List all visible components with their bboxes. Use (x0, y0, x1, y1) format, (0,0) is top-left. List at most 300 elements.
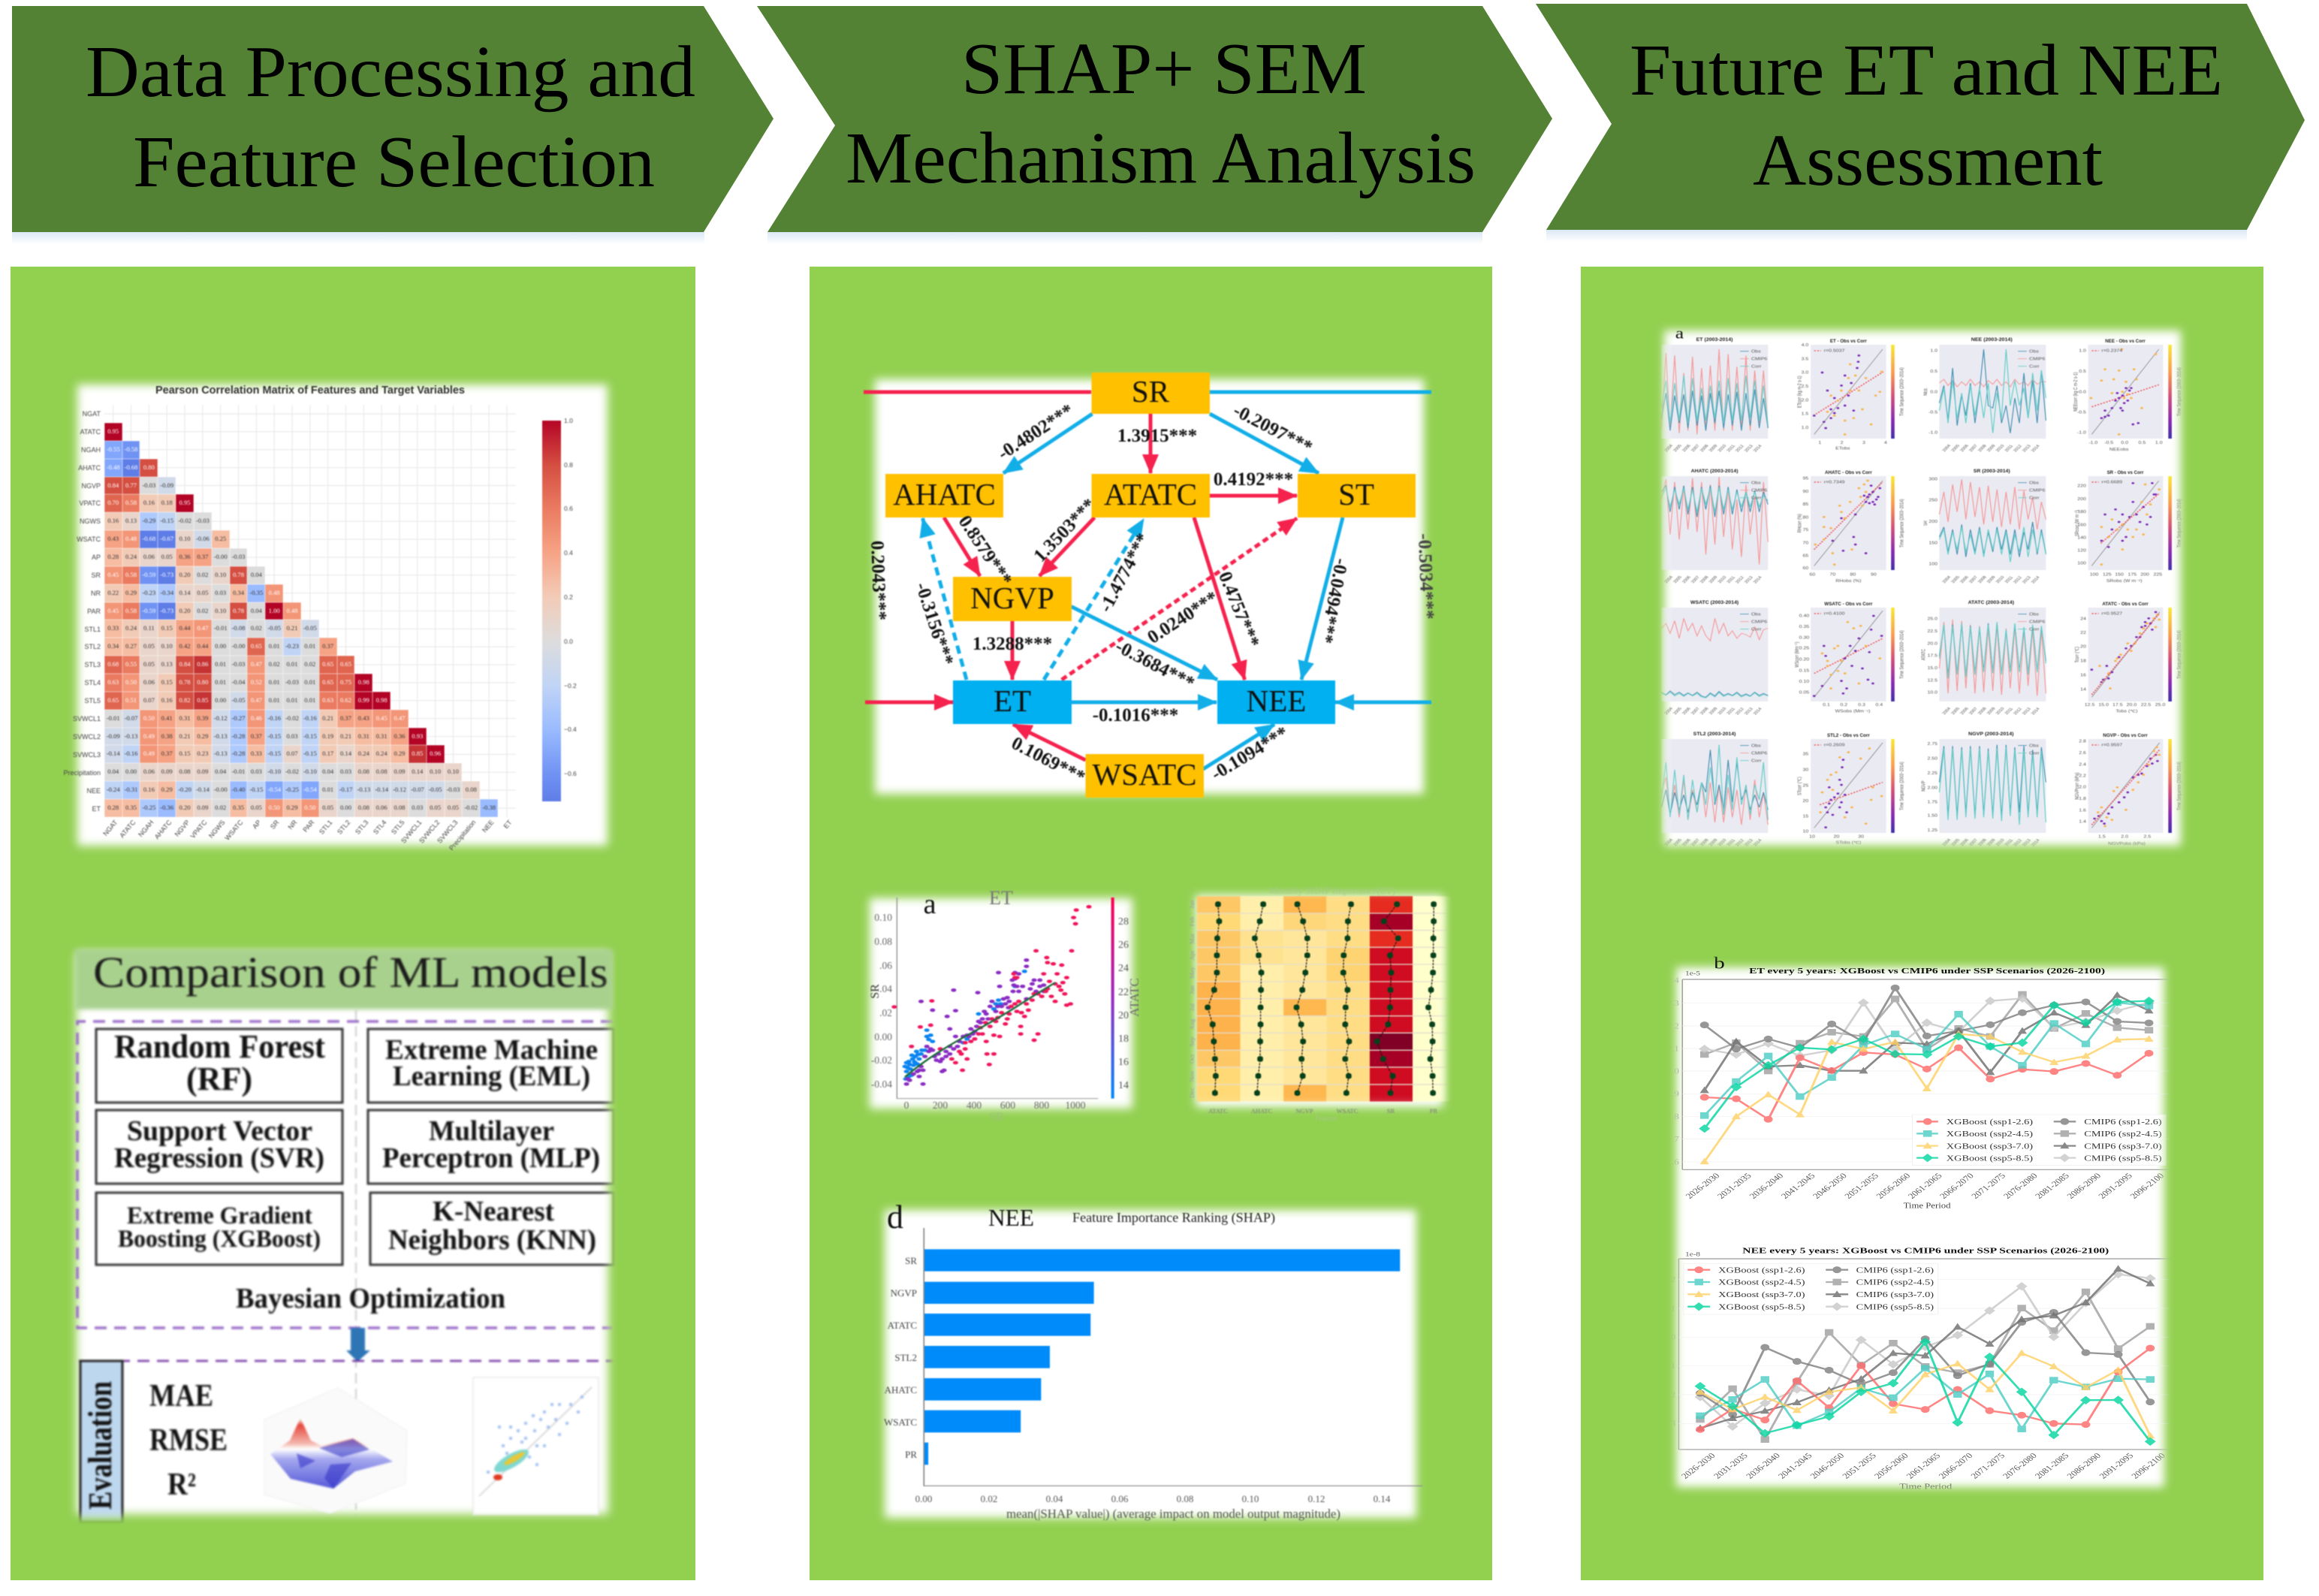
line chart: ET projections: 1e-5 (1685, 970, 1700, 977)
line chart: NEE projections: 2076-2080 (2001, 1452, 2039, 1480)
heatmap cells: -0.06 (196, 535, 210, 542)
path coefficients (867, 400, 1437, 788)
plot: NGVP observed vs corrected: 2.5 (2144, 835, 2152, 839)
plot: ATATC time series: 20.0 (1927, 642, 1938, 646)
heatmap colorbar: 1.0 (564, 417, 573, 424)
plot: ATATC observed vs corrected: 17.5 (2112, 704, 2123, 707)
heatmap cells: 0.80 (197, 678, 208, 686)
bias correction small multiples (1661, 324, 2182, 876)
heatmap row labels: VPATC (79, 499, 101, 507)
heatmap cells: 0.78 (179, 678, 191, 686)
line chart: ET projections (1666, 954, 2171, 1210)
plot: STL2 time series: 2010 (1717, 838, 1728, 847)
SHAP dependence scatter: ET vs SR: .02 (879, 1007, 892, 1018)
plot: NEE observed vs corrected: NEE - Obs vs Corr (2105, 338, 2146, 344)
plot: SR observed vs corrected: SRcorr (W m⁻²) (2076, 510, 2080, 536)
heatmap cells: 0.58 (125, 607, 137, 614)
heatmap cells: 0.06 (143, 553, 155, 560)
row: WSATC and ATATC (1661, 599, 2182, 746)
ET chart legend: CMIP6 (ssp3-7.0) (2084, 1142, 2162, 1151)
heatmap row labels: SR (91, 572, 101, 579)
line chart: ET projections: 2046-2050 (1811, 1172, 1849, 1200)
heatmap cells: 0.55 (125, 660, 137, 668)
monthly SHAP importance heatmap: Feature (1315, 1115, 1338, 1123)
plot: STL2 time series: 2008 (1699, 838, 1710, 847)
plot: NEE observed vs corrected: r=0.2374 (2101, 349, 2123, 353)
plot: SR observed vs corrected: 150 (2115, 573, 2124, 577)
plot: ATATC time series: 22.5 (1927, 630, 1938, 634)
heatmap cells: 0.65 (322, 678, 333, 686)
plot: AHATC observed vs corrected: 70 (1830, 573, 1836, 577)
SHAP dependence scatter: ET vs SR: 20 (1118, 1010, 1129, 1021)
line chart: ET projections: 2086-2090 (2065, 1172, 2103, 1200)
plot: ATATC observed vs corrected: Tcorr (℃) (2076, 647, 2080, 662)
plot: NEE observed vs corrected: 0.0 (2079, 391, 2087, 394)
heatmap cells: -0.12 (393, 786, 406, 793)
plot: STL2 observed vs corrected: 35 (1803, 753, 1809, 756)
heatmap cells: 0.18 (161, 499, 173, 506)
plot: SR observed vs corrected: 200 (2140, 573, 2150, 577)
NEE chart legend: CMIP6 (ssp2-4.5) (1856, 1278, 1934, 1287)
heatmap cells: 0.03 (286, 732, 298, 740)
plot: NGVP time series: 2005 (1950, 838, 1961, 847)
header arrow: Future ET and NEE Assessment: Future ET and NEE (1630, 30, 2223, 111)
plot: ET observed vs corrected: ETcorr (kg m-2 s-1) (1798, 376, 1803, 408)
plot: NEE time series: 2011 (2004, 445, 2014, 453)
evaluation label: Evaluation (82, 1381, 119, 1510)
plot: ET observed vs corrected: ETobs (1835, 447, 1850, 451)
plot: NGVP observed vs corrected: NGVPobs (kPa) (2108, 843, 2146, 846)
heatmap column labels: ET (502, 818, 514, 830)
heatmap cells: -0.27 (232, 714, 245, 722)
SHAP dependence scatter: ET vs SR: 18 (1118, 1033, 1129, 1045)
line chart: NEE projections: 2071-2075 (1969, 1452, 2007, 1480)
plot: SR observed vs corrected: 120 (2077, 549, 2087, 553)
heatmap cells: 0.20 (179, 571, 191, 578)
heatmap cells: 0.00 (340, 804, 351, 811)
plot: AHATC observed vs corrected: 65 (1803, 554, 1809, 558)
plot: ET time series: 2013 (1744, 445, 1754, 453)
heatmap cells: 0.09 (161, 768, 173, 775)
plot: STL2 observed vs corrected (1798, 732, 1905, 845)
line chart: NEE projections: 2061-2065 (1904, 1452, 1943, 1480)
SHAP feature importance bar chart: 0.10 (1242, 1493, 1259, 1504)
plot: SR observed vs corrected: 100 (2077, 562, 2087, 566)
heatmap cells: -0.03 (142, 481, 155, 489)
line chart: NEE projections: NEE every 5 years: XGBoost vs CMIP6 under SSP Scenarios (2026-2100) (1742, 1246, 2109, 1255)
model box: XGBoost: Extreme Gradient (127, 1202, 312, 1229)
SHAP dependence scatter: ET vs SR: 200 (933, 1100, 948, 1111)
ET chart legend: CMIP6 (ssp2-4.5) (2084, 1130, 2162, 1139)
plot: ATATC observed vs corrected: 18 (2080, 659, 2087, 663)
plot: AHATC observed vs corrected: 95 (1803, 477, 1809, 481)
heatmap cells: 0.65 (340, 660, 351, 668)
heatmap cells: -0.17 (339, 786, 352, 793)
heatmap cells: 0.47 (251, 660, 262, 668)
path coefficients: 0.0240*** (1144, 587, 1222, 648)
plot: NEE observed vs corrected: Time Sequence (2003~2014) (2177, 367, 2182, 416)
heatmap cells: 0.85 (197, 696, 208, 704)
SHAP dependence scatter: ET vs SR: ET (989, 887, 1013, 909)
plot: AHATC observed vs corrected: 80 (1850, 573, 1856, 577)
heatmap cells: 0.24 (376, 750, 388, 757)
heatmap cells: 0.08 (466, 786, 477, 793)
plot: SR time series: 200 (1928, 520, 1938, 524)
heatmap cells: 0.02 (197, 571, 208, 578)
header arrow: SHAP+ SEM Mechanism Analysis (757, 6, 1552, 244)
plot: NGVP observed vs corrected: 1.6 (2079, 809, 2087, 813)
plot: SR time series: 2010 (1995, 575, 2006, 584)
heatmap cells: 0.41 (161, 714, 173, 722)
heatmap column labels: AHATC (153, 818, 173, 840)
heatmap cells: -0.00 (214, 786, 228, 793)
heatmap cells: 0.14 (412, 768, 423, 775)
heatmap colorbar: −0.2 (564, 682, 577, 689)
line chart: ET projections: 2081-2085 (2034, 1172, 2071, 1200)
heatmap cells: 0.01 (286, 660, 298, 668)
heatmap cells: -0.10 (267, 768, 281, 775)
model box: extreme machine learning: Extreme Machine (385, 1034, 598, 1066)
heatmap cells: 0.48 (125, 535, 137, 542)
SHAP dependence scatter: ET vs SR: .04 (879, 983, 892, 994)
heatmap cells: -0.31 (125, 786, 137, 793)
plot: STL2 observed vs corrected: 10 (1809, 835, 1816, 839)
plot: ET observed vs corrected: 2 (1841, 442, 1844, 445)
plot: WSATC observed vs corrected: 0.2 (1840, 704, 1848, 707)
heatmap cells: 0.21 (340, 732, 351, 740)
path coefficients: 1.3503*** (1030, 495, 1100, 566)
heatmap cells: 0.16 (161, 696, 173, 704)
plot: SR observed vs corrected: 175 (2128, 573, 2137, 577)
line chart: ET projections: 2071-2075 (1970, 1172, 2008, 1200)
heatmap cells: -0.68 (142, 535, 155, 542)
plot: WSATC time series: 2012 (1735, 707, 1745, 716)
monthly SHAP importance heatmap: ATATC (1208, 1107, 1228, 1115)
heatmap cells: 1.00 (269, 607, 280, 614)
plot: WSATC observed vs corrected: WScorr (Mm⁻¹) (1795, 642, 1800, 668)
monthly SHAP importance heatmap: Jul (1188, 1003, 1196, 1011)
heatmap cells: 0.42 (179, 642, 191, 650)
heatmap row labels: WSATC (77, 536, 101, 543)
plot: NEE observed vs corrected: NEEcorr (kg C m-2 s-1) (2073, 373, 2079, 412)
line chart: ET projections: 2076-2080 (2001, 1172, 2040, 1200)
plot: NGVP time series: 2012 (2013, 839, 2023, 847)
heatmap cells: -0.15 (303, 750, 317, 757)
heatmap cells (104, 405, 517, 817)
plot: AHATC observed vs corrected: 80 (1803, 516, 1809, 520)
plot: WSATC observed vs corrected: 0.10 (1799, 680, 1810, 684)
node: NEE (1217, 680, 1335, 724)
heatmap cells: 0.37 (161, 750, 173, 757)
heatmap row labels: ET (92, 805, 101, 813)
SHAP feature importance bar chart: 0.00 (915, 1493, 932, 1504)
panel: data processing and feature selection (11, 267, 695, 1580)
heatmap cells: -0.68 (125, 463, 137, 471)
heatmap cells: 0.50 (304, 804, 315, 811)
plot: STL2 observed vs corrected: 20 (1834, 835, 1840, 839)
heatmap cells: 0.62 (340, 696, 351, 704)
monthly SHAP importance heatmap: WSATC (1337, 1107, 1359, 1115)
line chart: ET projections: b (1714, 954, 1725, 972)
plot: WSATC observed vs corrected: 0.35 (1799, 626, 1810, 629)
row: STL2 and NGVP (1661, 731, 2182, 876)
heatmap cells: -0.08 (232, 624, 245, 632)
SHAP feature importance bar chart: NGVP (891, 1287, 917, 1299)
plot: AHATC time series: 2012 (1735, 576, 1745, 584)
node: AHATC: AHATC (893, 477, 996, 511)
plot: NEE time series (1924, 336, 2046, 483)
heatmap cells: -0.14 (196, 786, 210, 793)
plot: STL2 observed vs corrected: 30 (1803, 768, 1809, 772)
plot: NEE time series: 1.0 (1930, 349, 1938, 353)
heatmap cells: -0.67 (160, 535, 173, 542)
heatmap cells: 0.01 (269, 642, 280, 650)
plot: ATATC observed vs corrected: 22.5 (2141, 704, 2152, 707)
plot: STL2 time series: 2007 (1690, 838, 1701, 847)
heatmap cells: -0.07 (411, 786, 424, 793)
line chart: ET projections: ET every 5 years: XGBoost vs CMIP6 under SSP Scenarios (2026-2100) (1749, 967, 2105, 976)
plot: SR observed vs corrected: r=0.6689 (2101, 481, 2123, 484)
heatmap cells: 0.05 (143, 660, 155, 668)
heatmap cells: 0.14 (179, 589, 191, 596)
heatmap cells: 0.49 (143, 732, 155, 740)
monthly SHAP importance heatmap: Oct (1188, 1054, 1196, 1063)
plot: STL2 observed vs corrected: 20 (1803, 800, 1809, 804)
plot: SR time series: SR (2003-2014) (1974, 468, 2010, 474)
heatmap cells: 0.24 (358, 750, 369, 757)
heatmap column labels: PAR (301, 818, 316, 834)
model box: KNN: Neighbors (KNN) (388, 1224, 596, 1256)
monthly SHAP importance heatmap: SR (1387, 1107, 1395, 1115)
monthly SHAP importance heatmap: May (1188, 966, 1196, 979)
heatmap row labels: NGVP (81, 482, 101, 490)
heatmap column labels: NGAT (101, 818, 119, 837)
plot: NGVP observed vs corrected (2076, 732, 2182, 846)
line chart: NEE projections: Time Period (1899, 1482, 1953, 1491)
plot: NEE time series: 2007 (1968, 444, 1979, 453)
heatmap cells: 0.02 (197, 607, 208, 614)
heatmap cells: 0.03 (215, 589, 226, 596)
plot: AHATC observed vs corrected: 60 (1810, 573, 1816, 577)
heatmap cells: -0.12 (214, 714, 228, 722)
heatmap cells: -0.15 (267, 732, 281, 740)
plot: ATATC time series: CMIP6 (2029, 620, 2046, 624)
plot: STL2 time series: CMIP6 (1751, 752, 1768, 756)
plot: AHATC time series: 2004 (1664, 575, 1674, 584)
heatmap column labels: STL4 (372, 819, 388, 836)
ML heading: Comparison of ML models (93, 948, 608, 997)
heatmap colorbar: −0.6 (564, 770, 577, 777)
heatmap cells: -0.09 (107, 732, 120, 740)
heatmap cells: 0.01 (322, 786, 333, 793)
plot: SR observed vs corrected: 140 (2077, 536, 2087, 540)
heatmap cells: 0.00 (215, 642, 226, 650)
plot: SR time series: 2009 (1986, 575, 1997, 584)
header arrow: Future ET and NEE Assessment: Assessment (1753, 120, 2103, 201)
plot: NEE time series: NEE (1924, 388, 1928, 396)
plot: SR time series: 100 (1928, 563, 1938, 566)
heatmap cells: 0.01 (304, 678, 315, 686)
plot: AHATC time series: 2008 (1699, 575, 1710, 584)
plot: STL2 time series: 2013 (1744, 839, 1754, 847)
ET chart legend: XGBoost (ssp1-2.6) (1947, 1118, 2033, 1127)
plot: ET time series: 2007 (1690, 444, 1701, 453)
line chart: ET projections: 2051-2055 (1843, 1172, 1881, 1200)
plot: NGVP observed vs corrected: 1.4 (2079, 820, 2087, 824)
plot: WSATC time series: CMIP6 (1751, 620, 1768, 624)
heatmap cells: 0.15 (161, 624, 173, 632)
NEE chart legend: XGBoost (ssp2-4.5) (1718, 1278, 1805, 1287)
heatmap cells: 0.05 (161, 553, 173, 560)
line chart: ET projections: 2.1 (1666, 1045, 1679, 1053)
plot: WSATC observed vs corrected: 0.30 (1799, 636, 1810, 640)
SHAP feature importance bar chart: 0.08 (1177, 1493, 1193, 1504)
heatmap cells: -0.38 (482, 804, 496, 811)
plot: SR observed vs corrected: 100 (2090, 573, 2099, 577)
plot: STL2 time series: 2014 (1753, 839, 1763, 847)
plot: ET observed vs corrected (1798, 338, 1905, 451)
plot: ATATC observed vs corrected: 20 (2080, 645, 2087, 649)
plot: ATATC time series: 2013 (2022, 707, 2032, 716)
plot: STL2 time series: Obs (1751, 744, 1761, 748)
plot: AHATC time series: 2011 (1726, 576, 1736, 584)
heatmap colorbar: 0.2 (564, 593, 573, 601)
plot: ET observed vs corrected: Time Sequence (2003~2014) (1900, 367, 1905, 416)
plot: NGVP time series: 2013 (2022, 839, 2032, 847)
plot: ET observed vs corrected: 4 (1884, 442, 1887, 445)
heatmap cells: 0.33 (107, 624, 119, 632)
plot: STL2 time series: 2012 (1735, 839, 1745, 847)
path coefficients: -0.4802*** (994, 400, 1078, 464)
heatmap row labels: AHATC (78, 464, 101, 472)
NEE chart legend: CMIP6 (ssp5-8.5) (1856, 1302, 1934, 1311)
path coefficients: 1.3288*** (973, 634, 1052, 654)
plot: NEE time series: 2006 (1959, 444, 1970, 453)
node: ATATC (1092, 474, 1210, 517)
plot: NGVP observed vs corrected: NGVP - Obs vs Corr (2103, 732, 2149, 738)
node: AHATC (885, 474, 1003, 517)
ET chart legend: XGBoost (ssp3-7.0) (1947, 1142, 2033, 1151)
heatmap cells: -0.03 (446, 786, 460, 793)
heatmap row labels: NEE (86, 787, 101, 795)
plot: STL2 time series: 2009 (1708, 838, 1719, 847)
model box: extreme machine learning (368, 1029, 614, 1103)
path coefficients: -0.2097*** (1230, 400, 1316, 458)
heatmap cells: 0.46 (251, 714, 262, 722)
heatmap cells: -0.58 (125, 445, 137, 453)
plot: ATATC observed vs corrected: 14 (2080, 688, 2087, 692)
heatmap cells: 0.06 (143, 768, 155, 775)
path coefficients: -0.1094*** (1208, 723, 1292, 785)
heatmap row labels: NR (91, 590, 101, 597)
plot: NEE observed vs corrected: -0.5 (2104, 442, 2114, 445)
plot: ET observed vs corrected: 1.0 (1802, 427, 1809, 430)
plot: ATATC observed vs corrected: 12.5 (2085, 704, 2095, 707)
line chart: ET projections: 2.2 (1666, 1022, 1679, 1030)
plot: SR time series: 2005 (1950, 575, 1961, 584)
plot: WSATC observed vs corrected (1795, 601, 1905, 714)
heatmap cells: 0.63 (107, 678, 119, 686)
model box: random forest: (RF) (186, 1060, 252, 1097)
heatmap cells: 0.99 (358, 696, 369, 704)
heatmap cells: 0.20 (179, 804, 191, 811)
plot: ET time series: 2004 (1664, 444, 1674, 453)
monthly SHAP importance heatmap: AHATC (1251, 1107, 1272, 1115)
heatmap cells: 0.39 (197, 714, 208, 722)
heatmap cells: 0.05 (448, 804, 459, 811)
line chart: NEE projections: 2031-2035 (1711, 1452, 1750, 1480)
node: SR (1092, 373, 1210, 414)
line chart: NEE projections: 1e-8 (1685, 1252, 1700, 1258)
heatmap colorbar: 0.0 (564, 638, 573, 645)
path coefficients: -0.3684*** (1112, 636, 1198, 694)
heatmap cells: 0.85 (412, 750, 423, 757)
plot: ATATC time series: 17.5 (1927, 654, 1938, 658)
heatmap cells: 0.65 (107, 696, 119, 704)
heatmap row labels: ATATC (80, 428, 101, 436)
SHAP dependence scatter: ET vs SR: 14 (1118, 1080, 1129, 1091)
heatmap cells: 0.47 (251, 696, 262, 704)
heatmap column labels: NGAH (137, 819, 155, 838)
plot: NEE time series: 2012 (2013, 445, 2023, 453)
plot: WSATC time series: Obs (1751, 613, 1761, 617)
plot: ET observed vs corrected: 3 (1862, 442, 1866, 445)
future projection charts card (1666, 954, 2171, 1491)
heatmap row labels: SVWCL3 (73, 751, 101, 759)
SHAP dependence scatter: ET vs SR: 400 (967, 1100, 982, 1111)
plot: SR observed vs corrected: Time Sequence (2003~2014) (2177, 499, 2182, 548)
correlation heatmap card (63, 384, 608, 852)
heatmap column labels: NEE (481, 819, 496, 834)
SHAP dependence scatter: ET vs SR: -0.02 (871, 1054, 892, 1066)
heatmap cells: 0.07 (286, 750, 298, 757)
plot: SR observed vs corrected: SRobs (W m⁻²) (2106, 580, 2143, 584)
model box: multilayer perceptron: Perceptron (MLP) (382, 1142, 600, 1174)
plot: NEE observed vs corrected: -0.5 (2077, 411, 2087, 415)
SHAP feature importance bar chart: STL2 (894, 1352, 917, 1363)
plot: WSATC observed vs corrected: r=0.4100 (1824, 612, 1845, 616)
plot: STL2 observed vs corrected: 15 (1803, 815, 1809, 819)
arrows between SEM nodes (864, 392, 1431, 769)
heatmap cells: -0.00 (232, 642, 245, 650)
plot: AHATC time series: 2007 (1690, 575, 1701, 584)
plot: NEE time series: 2004 (1942, 444, 1953, 453)
plot: ATATC observed vs corrected: 25.0 (2155, 704, 2166, 707)
plot: SR observed vs corrected: 180 (2077, 511, 2087, 514)
node: ET (953, 680, 1072, 724)
plot: ET time series: 2005 (1672, 444, 1683, 453)
SHAP dependence scatter: ET vs SR: 26 (1118, 940, 1129, 951)
path coefficients: 0.1069*** (1008, 733, 1088, 788)
plot: SR time series: 2004 (1942, 575, 1953, 584)
heatmap row labels: STL2 (84, 643, 101, 650)
plot: NGVP observed vs corrected: r=0.9597 (2101, 744, 2123, 747)
heatmap cells: 0.44 (197, 642, 208, 650)
heatmap cells: 0.02 (215, 804, 226, 811)
monthly SHAP importance heatmap: Apr (1188, 950, 1196, 961)
header arrow: Data Processing and Feature Selection: Data Processing and (86, 32, 695, 113)
plot: ATATC time series: Corr (2029, 628, 2040, 632)
heatmap row labels: PAR (87, 608, 101, 615)
heatmap cells: 0.21 (179, 732, 191, 740)
plot: ET observed vs corrected: 4.0 (1802, 344, 1809, 348)
plot: AHATC time series: Obs (1751, 481, 1761, 485)
plot: ET time series: Corr (1751, 365, 1762, 369)
plot: ET time series: 2014 (1753, 445, 1763, 453)
heatmap column labels: STL2 (336, 819, 352, 836)
SHAP dependence scatter: ET vs SR: 0.10 (874, 912, 892, 923)
plot: NGVP time series: 2014 (2031, 839, 2041, 847)
